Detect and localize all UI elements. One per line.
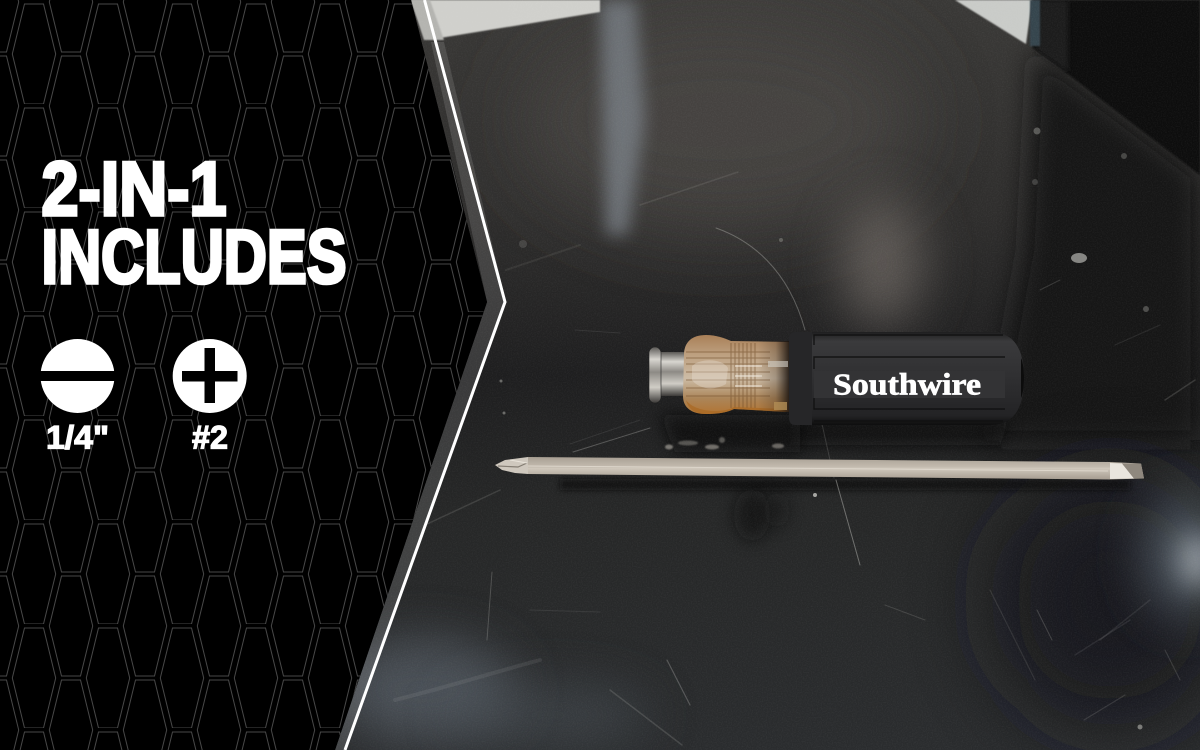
white chevron outline [345, 0, 505, 750]
title [42, 147, 346, 300]
title: INCLUDES [42, 215, 346, 300]
title: 2-IN-1 [42, 147, 226, 232]
hexagon texture on panel [0, 0, 487, 750]
label: phillips size: #2 [192, 420, 228, 456]
label: slotted size: 1/4" [46, 420, 109, 456]
screwdriver handle [649, 332, 1024, 425]
amber translucent shank [683, 335, 790, 414]
panel: black chevron with hexagon pattern [0, 0, 487, 750]
icon: slotted bit head [38, 339, 117, 413]
scratches [395, 172, 1195, 745]
dust specks [500, 128, 1149, 730]
chrome collar [649, 347, 686, 403]
screwdriver double-ended bit [495, 457, 1144, 480]
handle reflection on table [665, 437, 784, 450]
brand logo: Southwire [833, 366, 981, 402]
black rubber grip [789, 332, 1024, 425]
photo background: scratched black workbench [335, 0, 1200, 750]
translucent chevron band [335, 42, 506, 750]
icon: phillips bit head [173, 339, 247, 413]
